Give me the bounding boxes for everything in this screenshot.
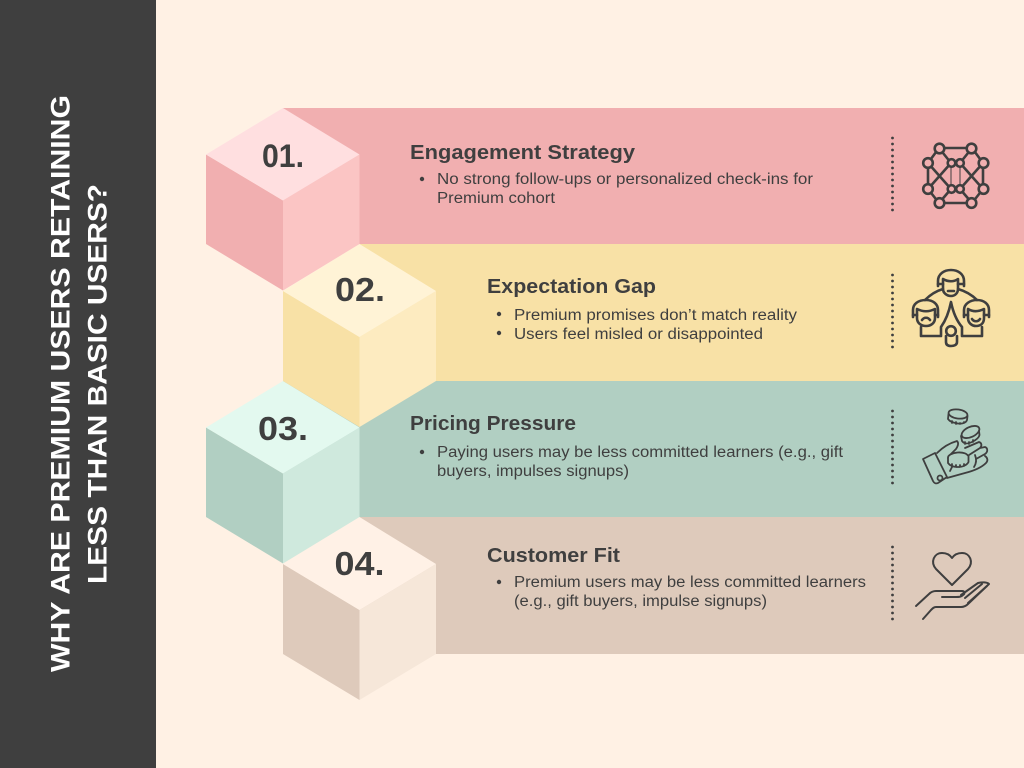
text block 3: buyers, impulses signups): [437, 463, 629, 480]
number 03: 03.: [258, 410, 308, 447]
title: WHY ARE PREMIUM USERS RETAINING: [46, 95, 76, 672]
text block 3: [420, 444, 844, 480]
coins: [948, 408, 981, 467]
text block 1: No strong follow-ups or personalized check-ins for: [437, 171, 813, 188]
title: LESS THAN BASIC USERS?: [82, 184, 112, 584]
text block 2: Users feel misled or disappointed: [514, 326, 763, 343]
icon: hand with heart: [916, 553, 989, 619]
text block 3: Paying users may be less committed learners (e.g., gift: [437, 444, 844, 461]
heading 4: Customer Fit: [487, 544, 620, 567]
divider 2: [891, 275, 894, 348]
title: [46, 95, 112, 672]
cube 2: [283, 244, 436, 427]
text block 1: Premium cohort: [437, 190, 556, 207]
text block 4: (e.g., gift buyers, impulse signups): [514, 593, 767, 610]
text block 4: [497, 574, 866, 610]
hand: [923, 441, 987, 483]
text block 1: [420, 171, 813, 207]
number 02: 02.: [335, 271, 385, 308]
heading 3: Pricing Pressure: [410, 412, 576, 435]
number 01: 01.: [262, 138, 304, 174]
band 1: engagement strategy: [283, 108, 1024, 244]
cube 1: [206, 108, 360, 290]
heading 1: Engagement Strategy: [410, 141, 636, 164]
icon: network: [923, 144, 988, 208]
band 3: pricing pressure: [283, 381, 1024, 517]
divider 1: [891, 138, 894, 211]
band 2: expectation gap: [360, 244, 1024, 381]
text block 4: Premium users may be less committed learners: [514, 574, 866, 591]
divider 3: [891, 411, 894, 484]
divider 4: [891, 547, 894, 620]
heading 2: Expectation Gap: [487, 275, 656, 298]
icon: hand with coins: [923, 408, 987, 483]
number 04: 04.: [334, 545, 384, 582]
side panel with title: [0, 0, 156, 768]
band 4: customer fit: [360, 517, 1024, 654]
text block 2: [497, 307, 797, 343]
text block 2: Premium promises don’t match reality: [514, 307, 797, 324]
cube 3: [206, 381, 360, 564]
cube 4: [283, 517, 436, 700]
icon: people: [913, 270, 989, 346]
